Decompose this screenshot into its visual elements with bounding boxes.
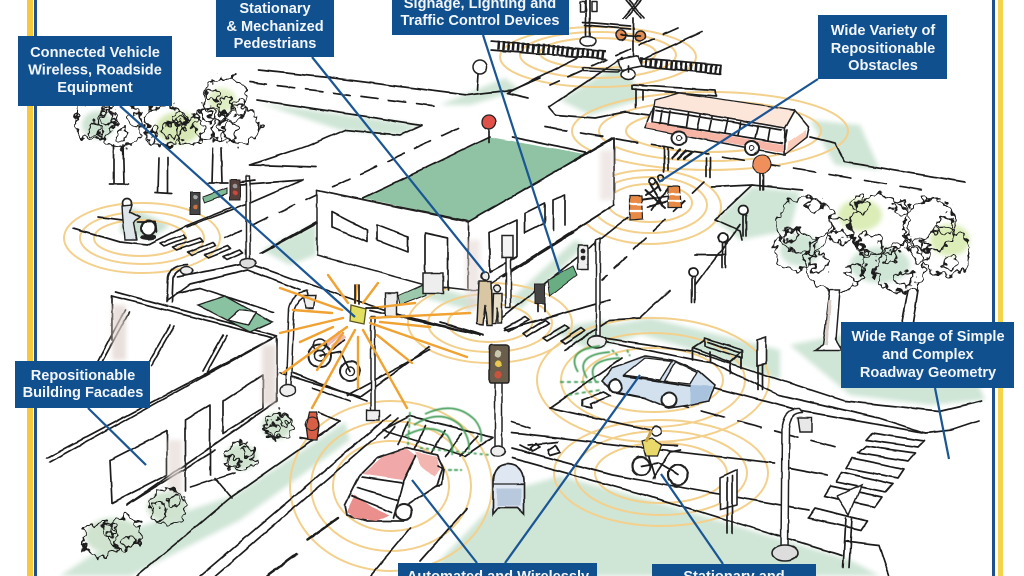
roadside unit mast <box>367 316 379 420</box>
rings: bicycle <box>554 420 768 526</box>
label: stationary and mechanized pedestrians: & Mechanized <box>226 19 324 35</box>
lamp: upper left <box>167 265 192 302</box>
traffic signals and poles <box>190 176 606 456</box>
red automated car <box>345 448 444 521</box>
signal: corner mast with green street sign <box>535 238 606 348</box>
repositionable building facade, left <box>47 292 277 505</box>
signal: near roadside unit <box>385 273 443 317</box>
fire hydrant <box>300 412 340 440</box>
yield sign <box>837 485 862 568</box>
rings: pedestrians at corner <box>408 283 572 363</box>
label: connected vehicle equipment: Wireless, Roadside <box>28 62 162 78</box>
pavement markings <box>530 392 610 455</box>
leader line: obstacles <box>659 79 818 182</box>
label: automated and wirelessly connected vehicles <box>398 563 597 576</box>
label: connected vehicle equipment: Equipment <box>57 80 133 96</box>
rail crossing: tracks <box>490 41 722 74</box>
label: stationary and mechanized bicycles <box>652 564 816 576</box>
rings: red automated car <box>290 401 492 571</box>
bus <box>632 85 809 155</box>
crosswalk: left by wheelchair <box>160 235 243 260</box>
parked bicycles at rack <box>309 332 360 381</box>
label: repositionable obstacles: Repositionable <box>831 41 935 57</box>
barrel left <box>630 196 643 220</box>
facade shadow shading <box>112 305 276 495</box>
lamp: by facade <box>280 291 316 396</box>
lamp: lower right <box>772 409 812 561</box>
building windows and door <box>332 195 565 290</box>
tree: big right cluster <box>775 195 970 350</box>
tree: left cluster <box>75 78 259 193</box>
bench <box>693 338 742 374</box>
mailbox <box>493 464 524 514</box>
label: roadway geometry: and Complex <box>882 347 975 363</box>
street lamps <box>167 265 812 561</box>
bus stop shelter <box>664 147 710 177</box>
label: signage, lighting and traffic control devices <box>392 0 569 35</box>
leader line: connected vehicle equipment <box>120 106 355 317</box>
leader lines: automated vehicles <box>412 375 640 563</box>
signal rings: wireless coverage around each test object <box>64 27 848 571</box>
label: roadway geometry: Roadway Geometry <box>860 365 997 381</box>
facade braces <box>98 310 227 372</box>
label: roadway geometry <box>841 322 1014 388</box>
barrel right <box>668 186 681 208</box>
sign: round white <box>473 60 487 90</box>
label: connected vehicle equipment: Connected Vehicle <box>30 45 160 61</box>
pedestrians at corner <box>477 272 502 325</box>
street parking car behind facade <box>198 296 272 332</box>
label: stationary and mechanized pedestrians: Stationary <box>239 1 312 17</box>
central building with green roof <box>262 137 614 290</box>
label: signage, lighting and traffic control devices: Traffic Control Devices <box>401 13 559 29</box>
label: stationary and mechanized pedestrians: Pedestrians <box>234 36 316 52</box>
sign panel beside bicycle <box>720 470 737 533</box>
rings: obstacles <box>579 170 721 244</box>
roadside unit box <box>350 285 378 324</box>
signal: building side <box>502 236 513 308</box>
road signs <box>473 60 862 568</box>
sign: orange <box>753 155 771 190</box>
blue automated car <box>602 356 715 408</box>
leader line: building facades <box>88 408 146 465</box>
label: repositionable obstacles: Obstacles <box>848 58 918 74</box>
label: repositionable building facades: Repositionable <box>31 368 135 384</box>
crosswalk: right <box>808 433 924 530</box>
rings: bus <box>572 92 848 170</box>
sign panel by bench <box>757 337 766 390</box>
crosswalk under red car green signal <box>383 416 493 457</box>
parking meters <box>688 206 748 303</box>
signal: centre with amber head <box>489 345 509 456</box>
leader line: signage <box>483 35 560 273</box>
obstacles: barrels and debris <box>630 175 681 220</box>
signal: left intersection <box>190 176 256 268</box>
label: repositionable building facades <box>15 361 150 408</box>
label: repositionable building facades: Building Facades <box>23 385 143 401</box>
label: connected vehicle equipment <box>18 36 172 106</box>
shrubs along facade <box>83 412 292 557</box>
leader line: pedestrians <box>312 57 485 273</box>
building shadow shading <box>466 150 614 310</box>
facade windows and door <box>110 375 263 503</box>
bus windows <box>652 108 787 143</box>
crosswalk: corner by pedestrians <box>505 317 585 344</box>
label: repositionable obstacles: Wide Variety of <box>831 23 935 39</box>
leader line: roadway geometry <box>935 388 949 459</box>
label: roadway geometry: Wide Range of Simple <box>851 329 1005 345</box>
green wireless arcs from red car <box>405 408 490 470</box>
sign: red stop <box>482 115 496 142</box>
rings: rail crossing <box>500 27 696 87</box>
leader line: bicycles <box>661 474 723 564</box>
rings: wheelchair pedestrian <box>64 203 220 273</box>
green wireless arcs from blue car <box>560 346 630 395</box>
label: stationary and mechanized pedestrians <box>216 0 334 57</box>
rings: blue automated car <box>537 318 769 442</box>
rail crossing: signal masts and flashers <box>580 0 645 79</box>
cyclist <box>632 426 688 485</box>
wheelchair pedestrian <box>122 198 156 240</box>
label: repositionable obstacles <box>818 15 947 79</box>
roadside unit starburst: orange rays <box>280 275 470 408</box>
